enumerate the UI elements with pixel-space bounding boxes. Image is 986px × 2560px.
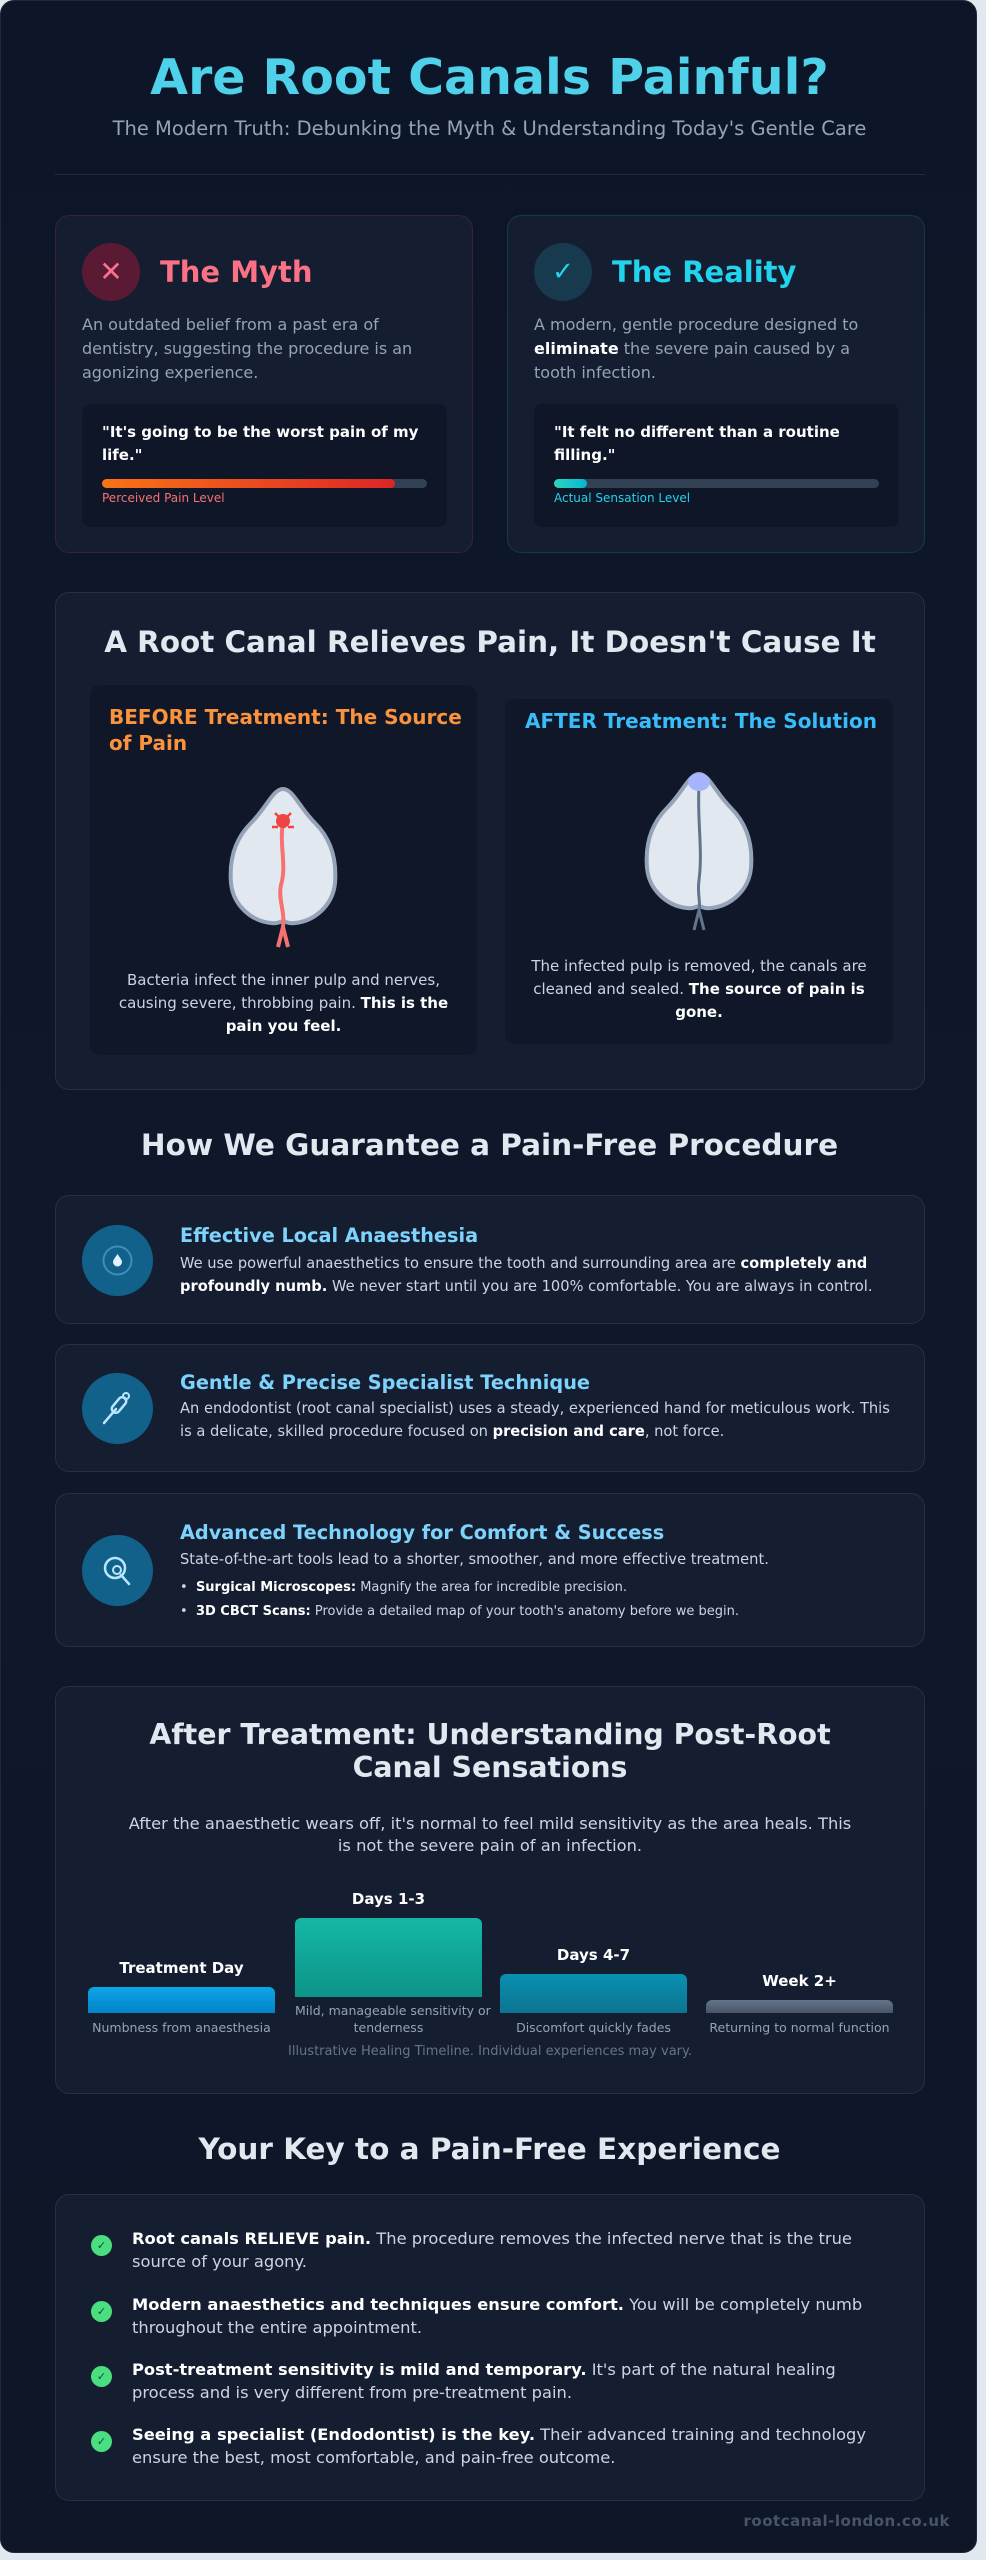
quote box: reality bbox=[534, 404, 899, 527]
bar: days 1-3: tenderness bbox=[354, 2020, 423, 2035]
heading: reality: The Reality bbox=[612, 255, 796, 289]
quote box: myth: "It's going to be the worst pain of my bbox=[102, 423, 418, 441]
text: reality description: eliminate the severe pain caused by a bbox=[534, 339, 850, 358]
bar: days 4-7: Days 4-7 bbox=[557, 1946, 630, 1964]
text: After the anaesthetic wears off, it's normal to feel mild sensitivity as the area heals. This bbox=[129, 1814, 851, 1833]
footer: rootcanal-london.co.uk bbox=[744, 2512, 950, 2530]
panel: key points bbox=[55, 2194, 925, 2501]
panel: anaesthesia: Effective Local Anaesthesia bbox=[180, 1224, 478, 1247]
text: reality description: tooth infection. bbox=[534, 363, 656, 382]
bullet list: • 3D CBCT Scans: Provide a detailed map of your tooth's anatomy before we begin. bbox=[180, 1604, 739, 1618]
bar: treatment day: Numbness from anaesthesia bbox=[92, 2020, 271, 2035]
quote box: myth bbox=[82, 404, 447, 527]
bar: days 1-3: Days 1-3 bbox=[352, 1890, 425, 1908]
text: myth description: dentistry, suggesting the procedure is an bbox=[82, 339, 412, 358]
bar: treatment day bbox=[88, 1959, 275, 2035]
item 2: ✓ bbox=[97, 2305, 106, 2318]
text: reality description: A modern, gentle procedure designed to bbox=[534, 315, 858, 334]
quote box: myth: Perceived Pain Level bbox=[102, 491, 225, 505]
panel: technique bbox=[55, 1344, 925, 1472]
bullet list: • Surgical Microscopes: Magnify the area for incredible precision. bbox=[180, 1580, 627, 1595]
sub-panel: before bbox=[90, 685, 477, 1055]
item 3: ✓ bbox=[97, 2370, 106, 2383]
bullet list bbox=[180, 1580, 739, 1618]
sub-panel: after: The infected pulp is removed, the canals are bbox=[531, 957, 867, 975]
subtitle: The Modern Truth: Debunking the Myth & Understanding Today's Gentle Care bbox=[113, 117, 866, 140]
text bbox=[128, 1814, 851, 1855]
bar: actual sensation bbox=[554, 479, 879, 488]
bar: days 4-7: Discomfort quickly fades bbox=[516, 2020, 671, 2035]
quote box: myth: life." bbox=[102, 446, 142, 464]
item 4 bbox=[91, 2425, 866, 2467]
panel: technique: Gentle & Precise Specialist Technique bbox=[180, 1371, 590, 1394]
text: reality description bbox=[534, 315, 858, 382]
panel: technology bbox=[55, 1493, 925, 1647]
item 4: Seeing a specialist (Endodontist) is the key. Their advanced training and technology bbox=[132, 2425, 866, 2444]
title: Are Root Canals Painful? bbox=[150, 49, 829, 106]
text: myth description: agonizing experience. bbox=[82, 363, 258, 382]
item 1: source of your agony. bbox=[132, 2252, 307, 2271]
panel: anaesthesia bbox=[55, 1195, 925, 1324]
bar: week 2+: Returning to normal function bbox=[709, 2020, 890, 2035]
panel: after treatment bbox=[55, 1686, 925, 2094]
heading: After Treatment: Understanding Post-Root bbox=[149, 1718, 831, 1751]
sub-panel: before: causing severe, throbbing pain. This is the bbox=[119, 994, 448, 1012]
item 2: Modern anaesthetics and techniques ensure comfort. You will be completely numb bbox=[132, 2295, 862, 2314]
panel: technique: is a delicate, skilled procedure focused on precision and care, not force. bbox=[180, 1423, 724, 1440]
footnote: Illustrative Healing Timeline. Individual experiences may vary. bbox=[288, 2044, 692, 2059]
sub-panel: before: BEFORE Treatment: The Source bbox=[109, 705, 462, 729]
sub-panel: after: gone. bbox=[675, 1003, 723, 1021]
chart: healing timeline bbox=[88, 1890, 893, 2059]
icon: cross bbox=[82, 243, 140, 301]
icon: microscope lens bbox=[82, 1535, 153, 1606]
item 1: ✓ bbox=[97, 2239, 106, 2252]
bar: perceived pain bbox=[102, 479, 427, 488]
item 3: Post-treatment sensitivity is mild and temporary. It's part of the natural healing bbox=[132, 2360, 836, 2379]
bar: days 1-3: Mild, manageable sensitivity or bbox=[295, 2003, 491, 2018]
text: myth description: An outdated belief from a past era of bbox=[82, 315, 379, 334]
bar: days 4-7 bbox=[500, 1946, 687, 2035]
panel: reality bbox=[507, 215, 925, 553]
sub-panel: before: Bacteria infect the inner pulp and nerves, bbox=[127, 971, 440, 989]
icon: check: ✓ bbox=[552, 257, 574, 287]
heading: myth: The Myth bbox=[160, 255, 312, 289]
panel: technique: An endodontist (root canal specialist) uses a steady, experienced hand for meticulous work. This bbox=[180, 1400, 890, 1417]
panel: myth bbox=[55, 215, 473, 553]
item 3: process and is very different from pre-treatment pain. bbox=[132, 2383, 572, 2402]
panel: anaesthesia: We use powerful anaesthetics to ensure the tooth and surrounding area are completely and bbox=[180, 1255, 867, 1272]
sub-panel: after: AFTER Treatment: The Solution bbox=[525, 709, 877, 733]
quote box: reality: Actual Sensation Level bbox=[554, 491, 690, 505]
quote box: reality: filling." bbox=[554, 446, 615, 464]
item 2: throughout the entire appointment. bbox=[132, 2318, 422, 2337]
heading: A Root Canal Relieves Pain, It Doesn't Cause It bbox=[104, 625, 876, 659]
item 1: Root canals RELIEVE pain. The procedure removes the infected nerve that is the true bbox=[132, 2229, 852, 2248]
item 2 bbox=[91, 2295, 862, 2337]
bar: week 2+ bbox=[706, 1972, 893, 2035]
item 4: ✓ bbox=[97, 2435, 106, 2448]
heading: guarantee: How We Guarantee a Pain-Free Procedure bbox=[141, 1128, 838, 1162]
item 3 bbox=[91, 2360, 836, 2402]
icon: infected tooth bbox=[228, 787, 338, 948]
item 1 bbox=[91, 2229, 852, 2271]
icon: drop bbox=[82, 1225, 153, 1296]
panel: anaesthesia: profoundly numb. We never start until you are 100% comfortable. You are always in control. bbox=[180, 1278, 872, 1295]
sub-panel: after: cleaned and sealed. The source of pain is bbox=[533, 980, 865, 998]
heading: Canal Sensations bbox=[353, 1751, 627, 1784]
sub-panel: after bbox=[505, 699, 893, 1044]
sub-panel: before: pain you feel. bbox=[226, 1017, 341, 1035]
panel: technology: Advanced Technology for Comfort & Success bbox=[180, 1521, 664, 1544]
quote box: reality: "It felt no different than a routine bbox=[554, 423, 840, 441]
panel: relieves pain bbox=[55, 592, 925, 1090]
bar: week 2+: Week 2+ bbox=[762, 1972, 837, 1990]
heading bbox=[149, 1718, 831, 1784]
icon: treated tooth bbox=[644, 772, 754, 930]
icon: cross: ✕ bbox=[99, 255, 123, 288]
panel: technology: State-of-the-art tools lead to a shorter, smoother, and more effective treatment. bbox=[180, 1551, 769, 1568]
heading: key: Your Key to a Pain-Free Experience bbox=[198, 2132, 781, 2166]
sub-panel: before: of Pain bbox=[109, 731, 187, 755]
bar: treatment day: Treatment Day bbox=[119, 1959, 244, 1977]
icon: instrument bbox=[82, 1373, 153, 1444]
item 4: ensure the best, most comfortable, and pain-free outcome. bbox=[132, 2448, 615, 2467]
bar: days 1-3 bbox=[295, 1890, 491, 2035]
icon: check bbox=[534, 243, 592, 301]
text: myth description bbox=[82, 315, 412, 382]
text: is not the severe pain of an infection. bbox=[338, 1836, 642, 1855]
